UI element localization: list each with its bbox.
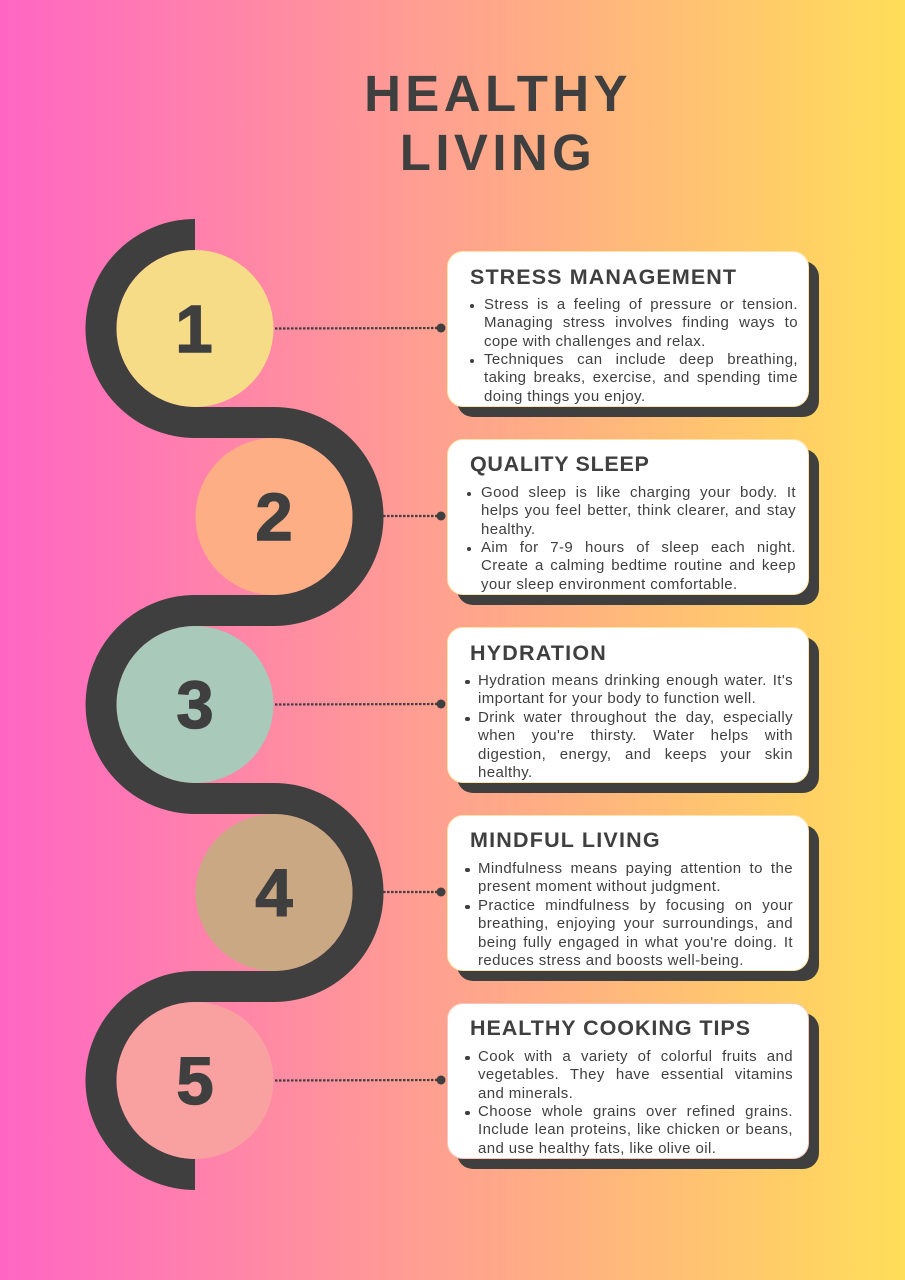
serpentine ribbon (101, 234, 368, 1174)
step 4 circle (196, 814, 352, 971)
bullet: sleep benefits (467, 484, 796, 538)
step 3 circle: 3 (176, 668, 214, 743)
step 5 circle: 5 (176, 1044, 214, 1119)
bullet: mindfulness practice: Practice mindfulness by focusing on your (478, 897, 793, 914)
bullet: fruits and vegetables (465, 1048, 793, 1102)
panel: quality sleep (447, 439, 819, 605)
panel: hydration (447, 627, 819, 793)
bullet: sleep benefits: helps you feel better, think clearer, and stay (481, 502, 796, 519)
step 1 circle (116, 250, 274, 407)
bullet: mindfulness practice: breathing, enjoying your surroundings, and (478, 915, 793, 932)
step 2 circle (196, 438, 352, 595)
panel: healthy cooking tips (447, 1003, 819, 1169)
title: HEALTHY (364, 65, 632, 122)
bullet: stress definition: cope with challenges and relax. (484, 332, 706, 350)
bullet: stress techniques: doing things you enjoy. (484, 388, 646, 404)
bullet: hydration advice (465, 709, 793, 781)
bullet: stress techniques: Techniques can include deep breathing, (484, 351, 798, 368)
connector 3 (275, 700, 446, 708)
bullet: grains and proteins: Include lean proteins, like chicken or beans, (478, 1121, 793, 1138)
bullet: hydration advice: when you're thirsty. Water helps with (478, 727, 793, 744)
connector 1 (275, 324, 446, 332)
heading: quality sleep: QUALITY SLEEP (470, 452, 650, 476)
panel: mindful living (447, 815, 819, 981)
step 4 circle: 4 (255, 856, 293, 931)
bullet: fruits and vegetables: and minerals. (478, 1084, 573, 1102)
bullet: sleep benefits: healthy. (481, 520, 536, 538)
step 5 circle (116, 1002, 274, 1159)
bullet: grains and proteins (465, 1103, 793, 1156)
bullet: mindfulness definition: Mindfulness means paying attention to the (478, 860, 793, 877)
heading: healthy cooking tips: HEALTHY COOKING TIPS (470, 1016, 751, 1040)
bullet: sleep advice (467, 539, 796, 592)
step 3 circle (116, 626, 274, 783)
connector 2 (383, 512, 446, 520)
bullet: hydration definition: Hydration means drinking enough water. It's (478, 672, 793, 689)
step 1 circle: 1 (175, 292, 213, 367)
bullet: sleep benefits: Good sleep is like charging your body. It (481, 484, 796, 501)
bullet: hydration definition: important for your body to function well. (478, 690, 756, 707)
bullet: stress techniques: taking breaks, exercise, and spending time (484, 369, 798, 386)
bullet: mindfulness definition (465, 860, 793, 895)
heading: mindful living: MINDFUL LIVING (470, 828, 661, 852)
bullet: stress definition (470, 296, 798, 350)
bullet: hydration advice: healthy. (478, 764, 533, 781)
heading: hydration: HYDRATION (470, 641, 607, 665)
bullet: hydration definition (465, 672, 793, 707)
bullet: sleep advice: your sleep environment comfortable. (481, 576, 738, 592)
bullet: mindfulness definition: present moment without judgment. (478, 878, 721, 895)
heading: stress management: STRESS MANAGEMENT (470, 265, 737, 289)
bullet: grains and proteins: and use healthy fats, like olive oil. (478, 1140, 716, 1156)
connector 4 (383, 888, 446, 896)
bullet: sleep advice: Create a calming bedtime routine and keep (481, 557, 796, 574)
bullet: fruits and vegetables: vegetables. They have essential vitamins (478, 1066, 793, 1083)
bullet: stress definition: Managing stress involves finding ways to (484, 314, 798, 331)
title: LIVING (400, 124, 596, 181)
bullet: mindfulness practice: reduces stress and boosts well-being. (478, 952, 744, 969)
bullet: hydration advice: digestion, energy, and keeps your skin (478, 746, 793, 762)
bullet: fruits and vegetables: Cook with a variety of colorful fruits and (478, 1048, 793, 1065)
bullet: mindfulness practice: being fully engaged in what you're doing. It (478, 934, 793, 950)
bullet: stress techniques (470, 351, 798, 404)
title (364, 65, 632, 181)
bullet: mindfulness practice (465, 897, 793, 969)
bullet: sleep advice: Aim for 7-9 hours of sleep each night. (481, 539, 796, 556)
connector 5 (275, 1076, 446, 1084)
bullet: grains and proteins: Choose whole grains over refined grains. (478, 1103, 793, 1120)
panel: stress management (447, 251, 819, 417)
step 2 circle: 2 (255, 480, 293, 555)
bullet: hydration advice: Drink water throughout the day, especially (478, 709, 793, 726)
bullet: stress definition: Stress is a feeling of pressure or tension. (484, 296, 798, 313)
